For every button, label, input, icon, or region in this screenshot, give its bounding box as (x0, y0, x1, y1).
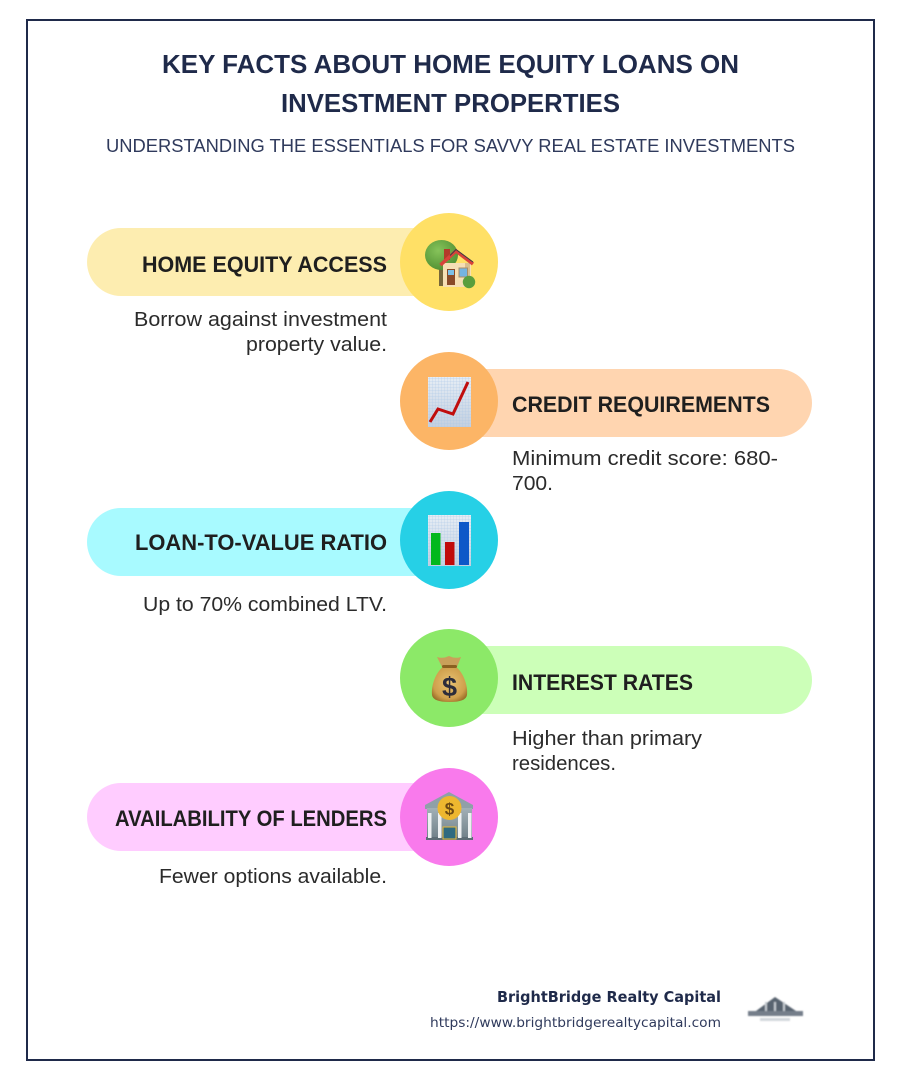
pill: interest rates (450, 646, 812, 714)
circle: credit requirements (400, 352, 498, 450)
circle: home equity access (400, 213, 498, 311)
description: interest rates (512, 727, 703, 775)
description: credit requirements: Minimum credit score: 680- (512, 447, 778, 470)
heading: loan-to-value ratio: LOAN-TO-VALUE RATIO (135, 530, 387, 555)
icon: bar chart (428, 515, 471, 566)
panel: loan-to-value ratio (87, 491, 498, 616)
description: credit requirements: 700. (512, 472, 553, 495)
subtitle: UNDERSTANDING THE ESSENTIALS FOR SAVVY REAL ESTATE INVESTMENTS (106, 136, 795, 156)
panel: availability of lenders (87, 768, 498, 888)
icon: company logo (748, 997, 803, 1021)
circle: interest rates (400, 629, 498, 727)
title (162, 49, 739, 118)
circle: availability of lenders (400, 768, 498, 866)
heading: interest rates: INTEREST RATES (512, 670, 693, 695)
description: loan-to-value ratio: Up to 70% combined LTV. (143, 593, 387, 616)
pill: home equity access (87, 228, 450, 296)
description: home equity access: Borrow against investment (134, 308, 387, 331)
icon: bank with coin: $ (445, 800, 455, 818)
icon: house with tree (425, 240, 475, 288)
title: INVESTMENT PROPERTIES (281, 88, 620, 118)
footer: company name: BrightBridge Realty Capital (497, 988, 721, 1006)
panel: home equity access (87, 213, 498, 356)
panel: credit requirements (400, 352, 812, 495)
description: home equity access (134, 308, 387, 356)
icon: money bag: $ (442, 672, 457, 702)
description: credit requirements (512, 447, 778, 495)
title: KEY FACTS ABOUT HOME EQUITY LOANS ON (162, 49, 739, 79)
icon: bank with coin (425, 792, 473, 840)
heading: credit requirements: CREDIT REQUIREMENTS (512, 392, 770, 417)
description: home equity access: property value. (246, 333, 387, 356)
pill: credit requirements (450, 369, 812, 437)
icon: line chart (428, 377, 471, 427)
heading: availability of lenders: AVAILABILITY OF LENDERS (115, 806, 387, 831)
description: interest rates: residences. (512, 752, 616, 775)
icon: money bag (432, 656, 467, 702)
description: availability of lenders: Fewer options available. (159, 865, 387, 888)
pill: availability of lenders (87, 783, 450, 851)
heading: home equity access: HOME EQUITY ACCESS (142, 252, 387, 277)
circle: loan-to-value ratio (400, 491, 498, 589)
description: interest rates: Higher than primary (512, 727, 703, 750)
panel: interest rates (400, 629, 812, 775)
pill: loan-to-value ratio (87, 508, 450, 576)
footer: website url: https://www.brightbridgerealtycapital.com (430, 1016, 721, 1031)
